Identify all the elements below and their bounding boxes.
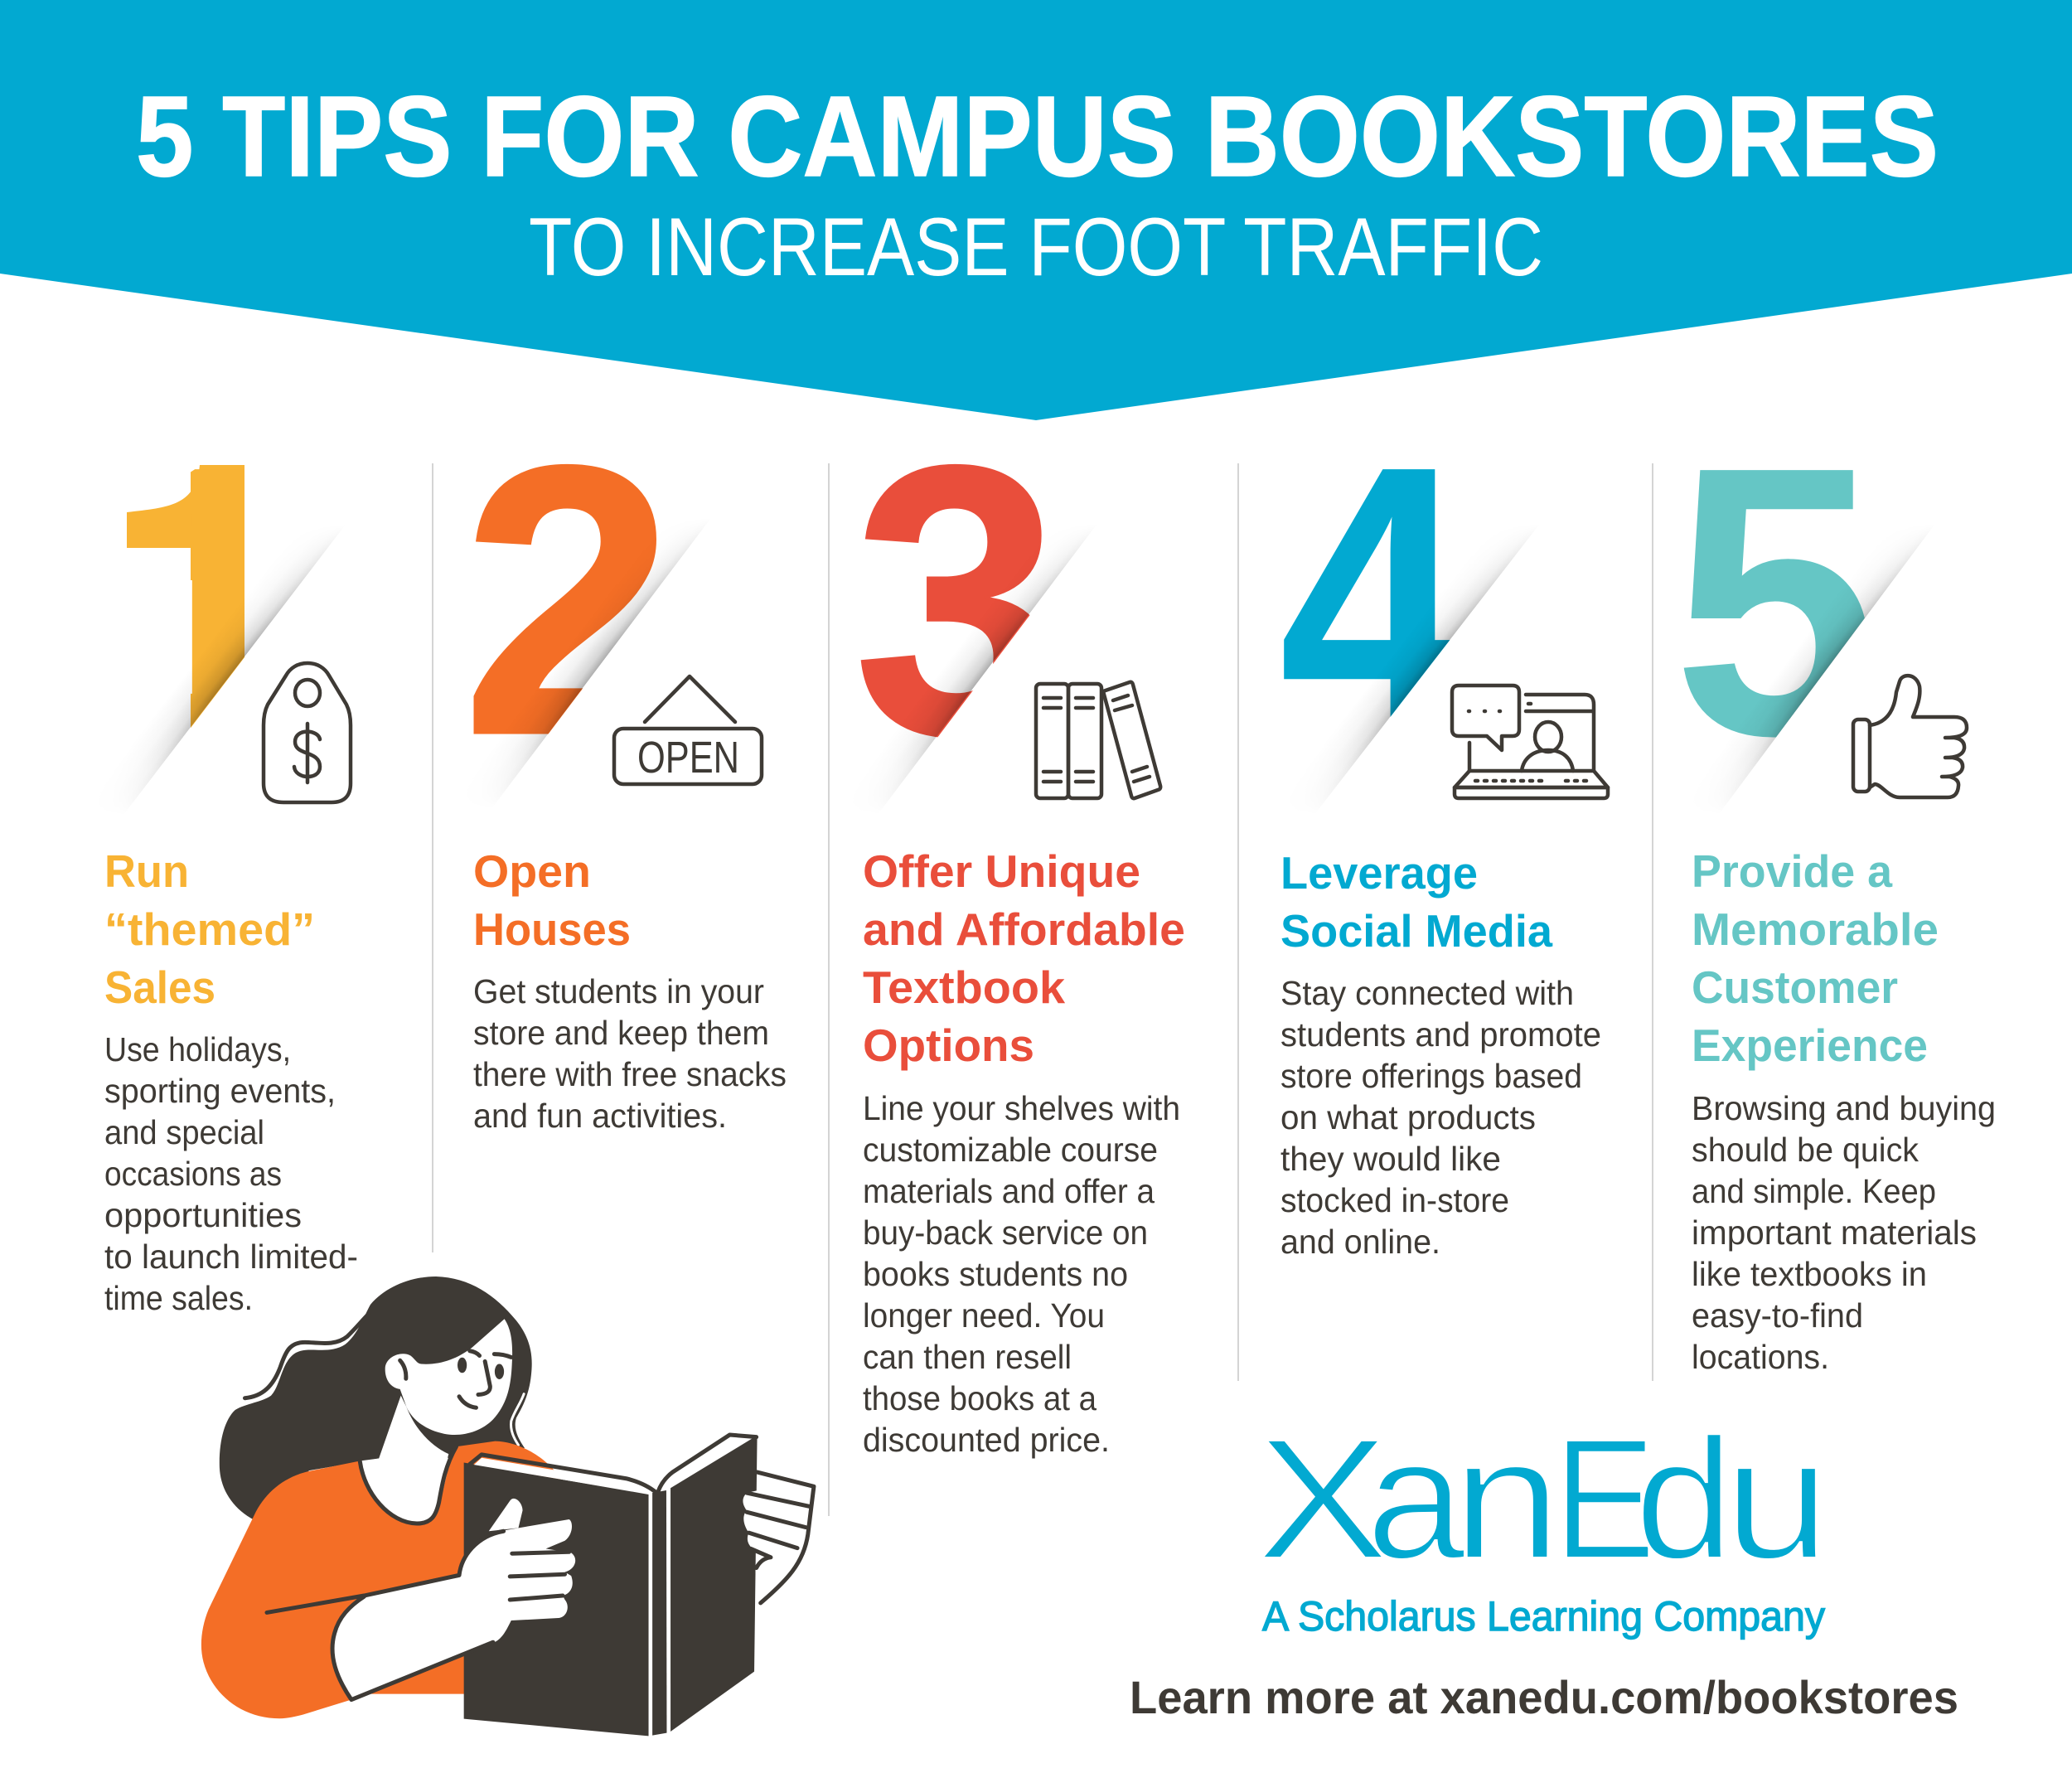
body text: discounted price.	[863, 1421, 1110, 1459]
number 1	[127, 465, 335, 796]
heading: Provide a	[1692, 845, 1892, 897]
number 1: 1	[103, 386, 316, 814]
panel: tip 1	[104, 465, 356, 1310]
body text: important materials	[1692, 1213, 1977, 1252]
number 4: 4	[1279, 385, 1470, 814]
heading: “themed”	[104, 903, 315, 955]
body text: locations.	[1692, 1338, 1829, 1376]
header banner	[0, 0, 2072, 420]
icon: price tag	[264, 663, 351, 802]
heading	[1692, 845, 1939, 1071]
body text: there with free snacks	[473, 1055, 787, 1093]
body text: customizable course	[863, 1131, 1158, 1169]
body text: they would like	[1280, 1140, 1501, 1178]
body text: books students no	[863, 1255, 1128, 1293]
body text: and online.	[1280, 1223, 1440, 1261]
number 5: 5	[1673, 388, 1878, 816]
body text: stocked in-store	[1280, 1181, 1509, 1219]
call to action: Learn more at xanedu.com/bookstores	[1130, 1671, 1958, 1723]
heading: Options	[863, 1020, 1034, 1071]
heading: and Affordable	[863, 903, 1185, 955]
heading: Social Media	[1280, 905, 1552, 957]
body text: materials and offer a	[863, 1172, 1155, 1210]
body text: store and keep them	[473, 1014, 769, 1052]
body text: store offerings based	[1280, 1057, 1582, 1095]
number 5	[1684, 470, 1924, 796]
logo: XanEdu: n	[1452, 1403, 1561, 1596]
body text: time sales.	[104, 1279, 253, 1317]
illustration: woman reading a book	[201, 1276, 814, 1736]
logo: XanEdu	[1256, 1403, 1830, 1596]
body text: students and promote	[1280, 1015, 1601, 1054]
logo: XanEdu: u	[1724, 1403, 1830, 1596]
body text	[104, 1030, 358, 1317]
heading: Run	[104, 845, 189, 897]
panel: tip 5	[1684, 470, 1994, 1369]
heading: Houses	[473, 903, 631, 955]
icon: laptop with video chat	[1452, 685, 1608, 798]
number 3	[860, 464, 1086, 795]
body text: should be quick	[1692, 1131, 1919, 1169]
number 4	[1284, 469, 1528, 796]
heading: Experience	[1692, 1020, 1928, 1071]
subtitle: TO INCREASE FOOT TRAFFIC	[529, 201, 1543, 293]
panel: tip 3	[860, 464, 1184, 1459]
body text: Get students in your	[473, 972, 764, 1010]
heading: Sales	[104, 962, 215, 1013]
number 2	[474, 464, 700, 789]
body text: like textbooks in	[1692, 1255, 1927, 1293]
number 2: 2	[462, 386, 675, 814]
heading: Textbook	[863, 962, 1065, 1013]
body text: can then resell	[863, 1338, 1072, 1376]
tagline: A Scholarus Learning Company	[1262, 1593, 1825, 1640]
heading	[104, 845, 315, 1013]
logo: XanEdu: d	[1634, 1403, 1734, 1596]
body text: occasions as	[104, 1155, 282, 1193]
heading: Customer	[1692, 962, 1898, 1013]
body text	[863, 1089, 1180, 1459]
body text: and special	[104, 1113, 264, 1151]
heading: Open	[473, 845, 591, 897]
icon: books	[1036, 682, 1160, 798]
panel: tip 2	[474, 464, 786, 1127]
body text: and simple. Keep	[1692, 1172, 1936, 1210]
heading	[473, 845, 631, 955]
title: 5 TIPS FOR CAMPUS BOOKSTORES	[136, 73, 1939, 201]
body text: buy-back service on	[863, 1213, 1148, 1252]
body text: Line your shelves with	[863, 1089, 1180, 1127]
heading: Offer Unique	[863, 845, 1140, 897]
icon: open sign	[614, 676, 762, 784]
body text: longer need. You	[863, 1296, 1105, 1335]
number 3: 3	[854, 387, 1060, 814]
icon: open sign: OPEN	[637, 733, 739, 782]
logo: XanEdu: a	[1366, 1403, 1465, 1596]
body text	[1692, 1089, 1996, 1376]
logo: XanEdu: X	[1256, 1403, 1389, 1596]
body text: to launch limited-	[104, 1238, 358, 1276]
heading: Leverage	[1280, 847, 1478, 899]
body text	[473, 972, 787, 1135]
heading	[1280, 847, 1552, 957]
heading	[863, 845, 1185, 1071]
body text: sporting events,	[104, 1072, 336, 1110]
body text: Stay connected with	[1280, 974, 1574, 1012]
icon: thumbs up	[1853, 676, 1967, 797]
body text	[1280, 974, 1601, 1261]
body text: Use holidays,	[104, 1030, 291, 1068]
logo: XanEdu: E	[1553, 1403, 1656, 1596]
body text: on what products	[1280, 1098, 1536, 1136]
heading: Memorable	[1692, 903, 1939, 955]
body text: those books at a	[863, 1379, 1097, 1417]
body text: opportunities	[104, 1196, 302, 1234]
body text: Browsing and buying	[1692, 1089, 1996, 1127]
panel: tip 4	[1281, 469, 1610, 1253]
body text: easy-to-find	[1692, 1296, 1863, 1335]
body text: and fun activities.	[473, 1097, 727, 1135]
